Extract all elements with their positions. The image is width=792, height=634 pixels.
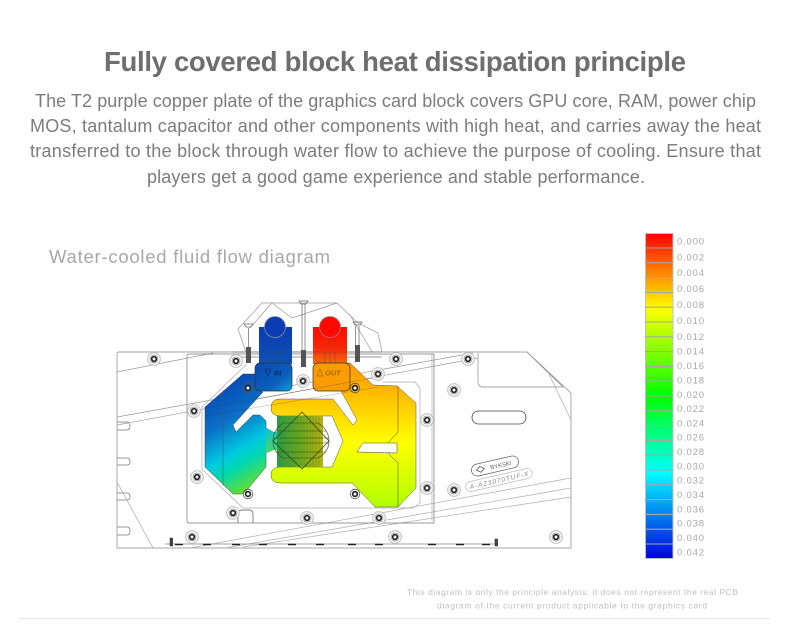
intro paragraph: transferred to the block through water flow to achieve the purpose of cooling. Ensure that <box>30 141 761 161</box>
scale labels: 0.030 <box>677 461 704 472</box>
scale labels: 0.042 <box>677 548 704 559</box>
brand badge <box>470 455 520 477</box>
cooling fluid: hot side <box>271 363 416 507</box>
scale labels: 0.000 <box>677 236 704 247</box>
scale labels: 0.032 <box>677 476 704 487</box>
diagram heading: Water-cooled fluid flow diagram <box>49 246 330 267</box>
footnote: diagram of the current product applicable to the graphics card <box>437 600 707 610</box>
brand badge: BYKSKI <box>490 461 513 472</box>
graphics card water block diagram <box>117 301 571 548</box>
scale labels: 0.028 <box>677 447 704 458</box>
footnote: This diagram is only the principle analysis: it does not represent the real PCB <box>407 587 738 597</box>
cooling fluid: cold side <box>205 374 273 494</box>
scale labels: 0.038 <box>677 519 704 530</box>
IN port block <box>255 363 292 391</box>
scale labels: 0.022 <box>677 404 704 415</box>
card outline <box>117 352 571 548</box>
footnote <box>407 587 738 610</box>
bracket bolts at bottom edge <box>170 538 498 546</box>
colour bar <box>646 234 673 558</box>
scale labels: 0.036 <box>677 504 704 515</box>
outlet pipe <box>313 316 347 364</box>
scale labels: 0.018 <box>677 375 704 386</box>
intro paragraph: players get a good game experience and stable performance. <box>147 167 645 187</box>
scale labels: 0.010 <box>677 316 704 327</box>
scale labels: 0.008 <box>677 300 704 311</box>
OUT port block: OUT <box>325 368 342 378</box>
scale labels: 0.012 <box>677 332 704 343</box>
lines over fluid <box>205 378 378 416</box>
right slot in fluid <box>357 443 397 453</box>
scale labels: 0.020 <box>677 390 704 401</box>
OUT port block <box>313 363 350 391</box>
scale labels: 0.026 <box>677 433 704 444</box>
scale labels: 0.034 <box>677 490 704 501</box>
inlet pipe <box>259 316 292 364</box>
colour scale legend <box>645 234 704 559</box>
model badge: A-AZ3070TUF-X <box>468 471 530 491</box>
scale labels: 0.014 <box>677 347 704 358</box>
intro paragraph: The T2 purple copper plate of the graphics card block covers GPU core, RAM, power chip <box>35 91 756 111</box>
intro paragraph: MOS, tantalum capacitor and other components with high heat, and carries away the heat <box>30 116 761 136</box>
scale labels: 0.016 <box>677 361 704 372</box>
GPU micro-channel fins <box>266 412 329 469</box>
scale labels: 0.006 <box>677 284 704 295</box>
scale ticks <box>645 248 673 544</box>
scale labels: 0.004 <box>677 268 704 279</box>
IN port block: IN <box>274 368 282 378</box>
intro paragraph <box>30 91 761 187</box>
mounting screws <box>148 301 562 543</box>
scale labels: 0.040 <box>677 533 704 544</box>
scale labels: 0.002 <box>677 252 704 263</box>
scale labels <box>677 236 704 559</box>
title: Fully covered block heat dissipation principle <box>104 46 686 77</box>
scale labels: 0.024 <box>677 418 704 429</box>
edge connector teeth <box>175 544 490 546</box>
terminal cap outline <box>232 303 382 357</box>
fitting detail lines <box>259 352 347 363</box>
